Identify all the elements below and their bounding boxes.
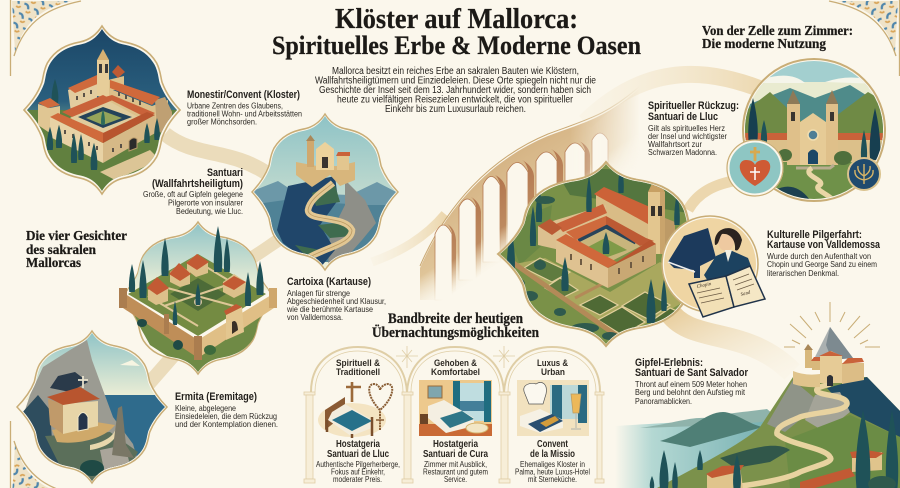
front walls — [50, 117, 103, 163]
text: Ermita: und der Kontemplation dienen. — [175, 419, 278, 429]
intro text: Mallorca besitzt ein reiches Erbe an sakralen Bauten wie Klöstern, — [332, 66, 579, 77]
icon: emblem — [848, 158, 880, 190]
heading: Von der Zelle zum Zimmer — [702, 23, 853, 51]
text: Kulturelle Pilgerfahrt: Chopin und George Sand zu einem — [767, 259, 877, 269]
back wings — [68, 84, 97, 120]
text: Cartoixa: von Valldemossa. — [287, 312, 343, 322]
front wings — [556, 246, 608, 288]
medallion: Santuari — [250, 112, 400, 272]
card: Spirituell & Traditionell: Hostatgeria — [336, 439, 380, 450]
card: Spirituell & Traditionell — [316, 358, 400, 484]
text: Gipfel-Erlebnis: Santuari de Sant Salvador — [635, 367, 749, 379]
heading: Bandbreite: Bandbreite der heutigen — [388, 311, 523, 327]
text: Santuari: Große, oft auf Gipfeln gelegene — [143, 189, 243, 199]
text: Cartoixa: Cartoixa (Kartause) — [287, 276, 371, 288]
card: Gehoben & Komfortabel: Zimmer mit Ausblick, — [424, 459, 487, 469]
room illustration — [419, 380, 492, 436]
text: Spiritueller Rückzug: Santuari de Lluc — [648, 111, 718, 123]
text: Ermita — [175, 391, 278, 429]
title: Klöster auf Mallorca: — [335, 3, 578, 35]
text: Gipfel-Erlebnis: Thront auf einem 509 Meter hohen — [635, 379, 747, 389]
rays — [784, 302, 880, 347]
text: Monestir: Urbane Zentren des Glaubens, — [187, 100, 283, 110]
tower — [648, 192, 660, 254]
icon: sacred heart — [727, 140, 783, 196]
card: Luxus & Urban: Luxus & — [537, 358, 568, 369]
card: Gehoben & Komfortabel — [419, 358, 492, 484]
open book: Chopin — [696, 282, 712, 290]
medallion: Ermita — [15, 330, 170, 486]
card: Spirituell & Traditionell: Authentische Pilgerherberge, — [316, 459, 400, 469]
aqueduct — [420, 86, 640, 300]
text: Santuari: (Wallfahrtsheiligtum) — [152, 178, 243, 190]
card: Spirituell & Traditionell: Traditionell — [336, 367, 380, 378]
card: Luxus & Urban — [515, 358, 590, 484]
text: Kulturelle Pilgerfahrt — [767, 229, 881, 278]
heading: Von der Zelle zum Zimmer: Die moderne Nutzung — [702, 36, 826, 51]
intro text: heute zu vielfältigen Reisezielen entwickelt, die von spiritueller — [337, 94, 574, 106]
text: Kulturelle Pilgerfahrt: Kulturelle Pilgerfahrt: — [767, 229, 862, 241]
text: Cartoixa — [286, 276, 386, 322]
text: Santuari: Bedeutung, wie Lluc. — [176, 206, 243, 216]
card: Gehoben & Komfortabel: Restaurant und gutem — [423, 466, 488, 476]
text: Spiritueller Rückzug: Spiritueller Rückzug: — [648, 100, 739, 112]
suite illustration — [517, 380, 589, 436]
text: Spiritueller Rückzug: Gilt als spirituelles Herz — [648, 123, 725, 133]
card: Gehoben & Komfortabel: Gehoben & — [434, 358, 477, 369]
medallion: Kartause gardens — [496, 160, 690, 348]
card: Spirituell & Traditionell: moderater Preis. — [333, 474, 382, 484]
text: Kulturelle Pilgerfahrt: Wurde durch den Aufenthalt von — [767, 251, 871, 261]
ornament: top-right corner — [829, 0, 900, 76]
heading: Die vier Gesichter: Die vier Gesichter — [26, 228, 127, 243]
courtyard — [70, 102, 137, 133]
heading: Bandbreite — [372, 311, 539, 341]
ornament: top-left corner — [10, 0, 81, 76]
medallion: Monestir / Convent — [20, 25, 185, 200]
open book — [689, 266, 765, 317]
text: Monestir: großer Mönchsorden. — [187, 116, 257, 126]
corner block — [38, 104, 60, 132]
card: Luxus & Urban: mit Sterneküche. — [528, 474, 577, 484]
heading: Bandbreite: Übernachtungsmöglichkeiten — [372, 324, 539, 341]
text: Spiritueller Rückzug: Schwarzen Madonna. — [648, 147, 717, 157]
card: Luxus & Urban: Convent — [537, 439, 569, 450]
mountain peak — [813, 327, 853, 361]
connecting ribbons — [145, 74, 792, 388]
medallion: Chopin and George Sand — [662, 216, 765, 317]
back wing — [596, 195, 650, 250]
text: Gipfel-Erlebnis — [635, 357, 749, 406]
landscape: Santuari de Sant Salvador — [615, 302, 900, 488]
medallion: Santuari de Lluc — [727, 58, 890, 207]
intro text: Einkehr bis zum Luxusurlaub reichen. — [385, 104, 526, 115]
text: Spiritueller Rückzug: der Insel und wichtigster — [648, 131, 727, 141]
text: Gipfel-Erlebnis: Berg und belohnt den Aufstieg mit — [635, 387, 746, 397]
text: Monestir: traditionell Wohn- und Arbeitsstätten — [187, 108, 302, 118]
courtyard walls — [120, 292, 198, 358]
title — [272, 3, 641, 60]
card: Gehoben & Komfortabel: Hostatgeria — [433, 439, 478, 450]
arcade frame — [304, 346, 604, 483]
intro text: Geschichte der Insel seit dem 13. Jahrhundert wider, sondern haben sich — [319, 85, 591, 96]
text: Santuari: Santuari — [207, 167, 243, 179]
text: Cartoixa: Abgeschiedenheit und Klausur, — [287, 296, 386, 306]
castle — [793, 371, 820, 387]
text: Ermita: Einsiedeleien, die dem Rückzug — [175, 411, 277, 421]
heading: Die vier Gesichter: des sakralen — [26, 242, 96, 257]
card: Gehoben & Komfortabel: Service. — [444, 474, 467, 484]
ornament: bottom-left corner — [10, 421, 81, 488]
text: Cartoixa: Anlagen für strenge — [287, 288, 350, 298]
icon: bed, cross and rosary — [318, 382, 392, 438]
title: Spirituelles Erbe & Moderne Oasen — [272, 30, 641, 60]
houses — [707, 466, 743, 488]
card: Spirituell & Traditionell: Fokus auf Einkehr, — [331, 466, 385, 476]
tower — [97, 60, 109, 98]
card: Gehoben & Komfortabel: Santuari de Cura — [423, 449, 488, 460]
card: Luxus & Urban: Palma, heute Luxus-Hotel — [515, 466, 590, 476]
intro text: Wallfahrtsheiligtümern und Einziedeleien. Diese Orte spiegeln nicht nur die — [315, 76, 596, 86]
text: Spiritueller Rückzug: Wallfahrtsort zur — [648, 139, 702, 149]
text: Santuari: Pilgerorte von insularer — [168, 198, 243, 208]
open book: Sand — [740, 290, 752, 298]
card: Luxus & Urban: Urban — [541, 367, 565, 378]
text: Spiritueller Rückzug — [648, 100, 739, 157]
card: Luxus & Urban: de la Missio — [530, 449, 575, 460]
left back wing — [538, 205, 606, 250]
heading: Die vier Gesichter: Mallorcas — [26, 255, 81, 270]
card: Luxus & Urban: Ehemaliges Kloster in — [520, 459, 585, 469]
courtyard — [576, 229, 641, 260]
heading: Die vier Gesichter — [26, 228, 127, 270]
card: Spirituell & Traditionell: Santuari de Lluc — [327, 449, 389, 460]
text: Santuari — [143, 167, 243, 216]
card: Spirituell & Traditionell: Spirituell & — [336, 358, 380, 369]
text: Kulturelle Pilgerfahrt: literarischen Denkmal. — [767, 268, 839, 278]
heading: Von der Zelle zum Zimmer: Von der Zelle zum Zimmer: — [702, 23, 853, 38]
card: Gehoben & Komfortabel: Komfortabel — [431, 367, 480, 378]
text: Gipfel-Erlebnis: Panoramablicken. — [635, 396, 692, 406]
text: Cartoixa: wie die berühmte Kartause — [286, 304, 373, 314]
intro text — [315, 66, 596, 115]
text: Monestir — [187, 89, 302, 126]
medallion: Cartoixa — [115, 220, 285, 376]
text: Gipfel-Erlebnis: Gipfel-Erlebnis: — [635, 357, 703, 369]
text: Ermita: Ermita (Eremitage) — [175, 391, 257, 403]
text: Monestir: Monestir/Convent (Kloster) — [187, 89, 300, 101]
text: Ermita: Kleine, abgelegene — [175, 403, 236, 413]
